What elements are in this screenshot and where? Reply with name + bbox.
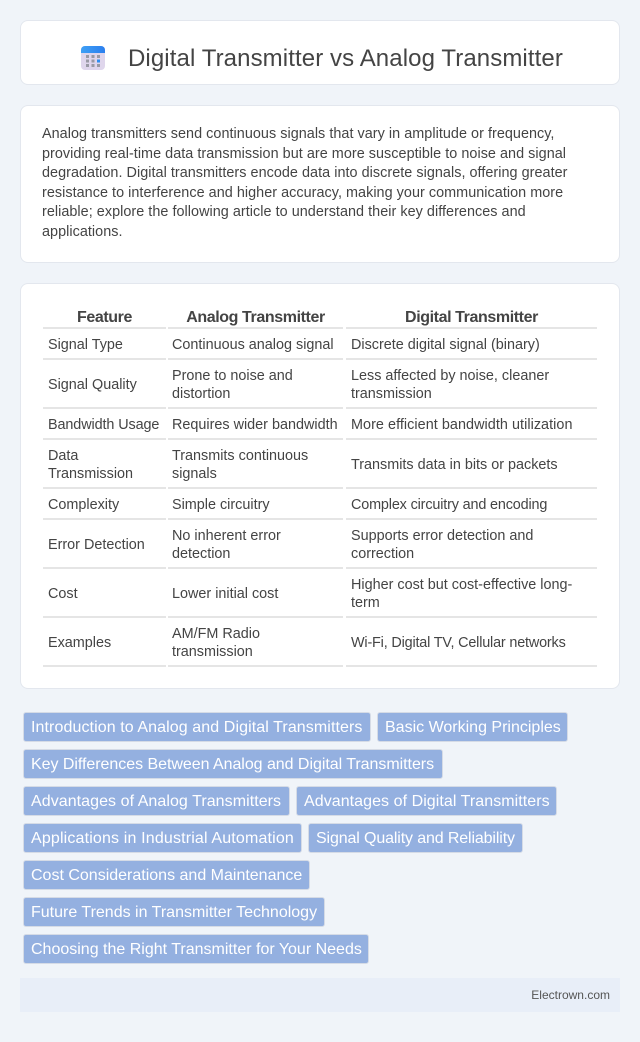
icon: calendar grid <box>81 46 105 70</box>
comparison table: Digital Transmitter <box>405 309 538 326</box>
intro text: resistance to interference and higher accuracy, making your communication more <box>42 184 563 200</box>
comparison table: Continuous analog signal <box>172 337 334 353</box>
comparison table: Prone to noise and <box>172 368 293 384</box>
title: Digital Transmitter vs Analog Transmitter <box>128 45 563 72</box>
topic tags: Applications in Industrial Automation <box>31 830 294 847</box>
footer credit: Electrown.com <box>531 988 610 1002</box>
comparison table: Wi-Fi, Digital TV, Cellular networks <box>351 635 566 651</box>
comparison table: Transmits continuous <box>172 448 308 464</box>
intro text: applications. <box>42 224 123 240</box>
intro text: providing real-time data transmission but are more susceptible to noise and signal <box>42 146 566 162</box>
topic tags: Basic Working Principles <box>385 719 561 736</box>
comparison table: No inherent error <box>172 528 281 544</box>
comparison table: Signal Type <box>48 337 123 353</box>
comparison table: Requires wider bandwidth <box>172 417 338 433</box>
topic tags: Future Trends in Transmitter Technology <box>31 904 317 921</box>
topic tags <box>23 712 568 964</box>
comparison table: transmission <box>172 644 253 660</box>
comparison table: Less affected by noise, cleaner <box>351 368 549 384</box>
comparison table: Signal Quality <box>48 377 137 393</box>
comparison table: correction <box>351 546 414 562</box>
comparison table: Analog Transmitter <box>186 309 325 326</box>
comparison table: Discrete digital signal (binary) <box>351 337 540 353</box>
comparison table: transmission <box>351 386 432 402</box>
comparison table: Bandwidth Usage <box>48 417 159 433</box>
intro text <box>42 126 568 240</box>
comparison table: Higher cost but cost-effective long- <box>351 577 572 593</box>
comparison table: Simple circuitry <box>172 497 270 513</box>
comparison table: detection <box>172 546 230 562</box>
comparison table <box>43 309 597 667</box>
topic tags: Signal Quality and Reliability <box>316 830 515 847</box>
comparison table: Transmission <box>48 466 133 482</box>
comparison table: Complex circuitry and encoding <box>351 497 547 513</box>
comparison table: Data <box>48 448 78 464</box>
header panel <box>20 20 620 85</box>
comparison table: distortion <box>172 386 230 402</box>
table panel <box>20 283 620 689</box>
comparison table: signals <box>172 466 217 482</box>
topic tags: Advantages of Digital Transmitters <box>304 793 550 810</box>
comparison table: Supports error detection and <box>351 528 533 544</box>
topic tags: Introduction to Analog and Digital Transmitters <box>31 719 363 736</box>
intro text: reliable; explore the following article to understand their key differences and <box>42 204 526 220</box>
comparison table: Cost <box>48 586 78 602</box>
comparison table: Feature <box>77 309 132 326</box>
footer bar <box>20 978 620 1012</box>
comparison table: Transmits data in bits or packets <box>351 457 558 473</box>
topic tags: Key Differences Between Analog and Digital Transmitters <box>31 756 434 773</box>
comparison table: More efficient bandwidth utilization <box>351 417 573 433</box>
intro panel <box>20 105 620 263</box>
topic tags: Cost Considerations and Maintenance <box>31 867 302 884</box>
comparison table: Examples <box>48 635 111 651</box>
topic tags: Advantages of Analog Transmitters <box>31 793 281 810</box>
comparison table: term <box>351 595 380 611</box>
comparison table: AM/FM Radio <box>172 626 260 642</box>
intro text: Analog transmitters send continuous signals that vary in amplitude or frequency, <box>42 126 554 142</box>
intro text: degradation. Digital transmitters encode data into discrete signals, offering greater <box>42 165 568 181</box>
comparison table: Error Detection <box>48 537 145 553</box>
topic tags: Choosing the Right Transmitter for Your Needs <box>31 941 362 958</box>
comparison table: Lower initial cost <box>172 586 278 602</box>
comparison table: Complexity <box>48 497 119 513</box>
